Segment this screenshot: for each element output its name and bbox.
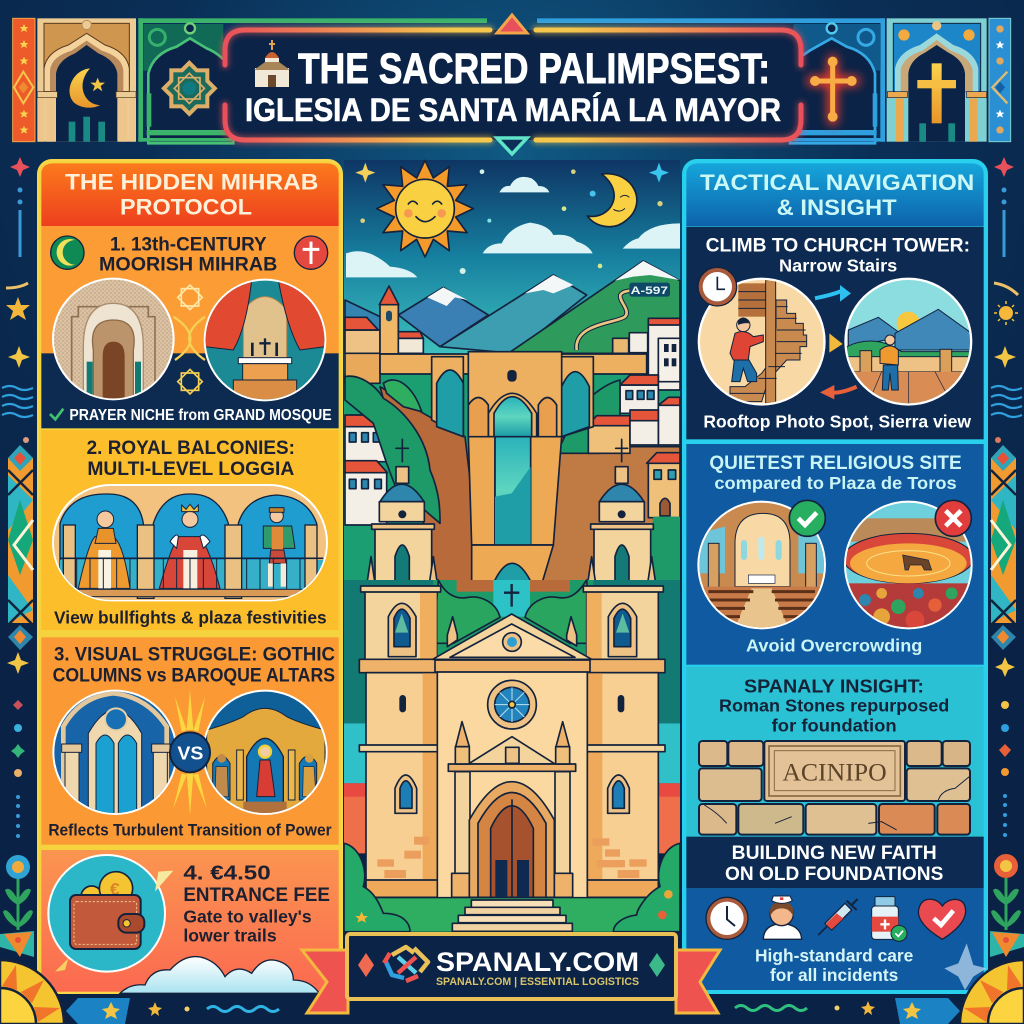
left side decorations <box>0 157 64 1024</box>
section 3 <box>41 637 339 845</box>
takeaway strip: ON OLD FOUNDATIONS <box>725 864 943 885</box>
title text: THE SACRED PALIMPSEST: <box>298 45 770 93</box>
star <box>861 1001 875 1015</box>
ribbon left <box>302 950 348 1013</box>
dotted line <box>18 188 22 257</box>
tribal band <box>991 445 1016 650</box>
wallet medallion: € <box>110 879 120 899</box>
altar medallion <box>203 279 327 401</box>
right blue strip <box>989 18 1011 142</box>
title text <box>245 45 781 128</box>
icon: clock <box>706 897 748 939</box>
section 4 background <box>41 850 339 992</box>
section 3 caption: Reflects Turbulent Transition of Power <box>48 822 332 840</box>
cliffs <box>344 373 680 590</box>
waves <box>2 386 33 417</box>
left panel <box>38 160 342 993</box>
church interior medallion <box>697 501 826 629</box>
cloud <box>120 957 319 993</box>
icon: top triangle <box>497 15 527 33</box>
icon: crescent badge <box>51 236 84 269</box>
VS badge <box>170 732 210 772</box>
icon: smiling sun <box>377 160 473 257</box>
ACINIPO inscription <box>769 746 900 796</box>
takeaway strip <box>686 837 984 888</box>
gothic medallion <box>52 690 178 817</box>
sky <box>344 160 680 373</box>
loggia illustration <box>52 484 328 601</box>
left tower <box>359 586 441 898</box>
panel frame <box>683 160 987 993</box>
title panel <box>225 30 801 140</box>
star <box>994 157 1014 177</box>
blue pennant <box>66 998 130 1024</box>
icon: small church <box>254 40 290 87</box>
entrance steps and lawn <box>344 843 680 932</box>
flower <box>3 855 33 930</box>
knot ornament <box>173 285 205 394</box>
mountains <box>345 261 680 353</box>
icon: glowing orange cross <box>810 57 857 122</box>
left tower upper <box>366 439 438 590</box>
section 2 caption: View bullfights & plaza festivities <box>54 607 327 627</box>
baroque medallion <box>202 690 328 815</box>
section 3 heading: 3. VISUAL STRUGGLE: GOTHIC <box>54 645 335 666</box>
section 4 <box>41 850 339 993</box>
right town <box>557 318 680 590</box>
takeaway strip: BUILDING NEW FAITH <box>732 843 937 864</box>
section 2 heading: 2. ROYAL BALCONIES: <box>87 438 295 459</box>
icon: moorish arch with crescent <box>37 18 136 142</box>
bullring medallion <box>843 501 973 629</box>
panel heading <box>41 163 339 226</box>
dot <box>23 437 29 443</box>
icon: eight point star <box>161 60 218 117</box>
care caption: for all incidents <box>770 965 898 985</box>
blue pennant <box>895 998 960 1024</box>
road label A-597: A-597 <box>631 285 668 297</box>
left orange strip <box>13 18 35 142</box>
section 1 caption: PRAYER NICHE from GRAND MOSQUE <box>69 407 332 424</box>
section 3 background <box>41 637 339 845</box>
quiet heading: QUIETEST RELIGIOUS SITE <box>709 453 962 474</box>
care caption <box>755 946 914 985</box>
section 2 heading: MULTI-LEVEL LOGGIA <box>87 459 294 480</box>
flower <box>991 854 1021 930</box>
waves <box>735 1006 840 1010</box>
tribal band <box>8 445 33 650</box>
stairs medallion <box>698 278 826 406</box>
panel heading <box>686 163 984 226</box>
insight background <box>686 667 984 837</box>
dot <box>995 437 1001 443</box>
icon: heart with check <box>918 899 966 939</box>
icon: check badge <box>789 500 825 536</box>
star <box>148 1002 162 1016</box>
section 2 background <box>41 430 339 630</box>
sun arc <box>6 283 28 288</box>
roman stone wall <box>699 741 970 835</box>
icon: nurse <box>763 896 802 939</box>
fee text: Gate to valley's <box>183 907 312 927</box>
icon: syringe <box>818 899 858 935</box>
right panel <box>683 160 987 993</box>
icon: medicine bottle <box>872 897 907 941</box>
panel heading: PROTOCOL <box>120 194 252 219</box>
star <box>994 346 1016 368</box>
right side decorations <box>960 157 1024 1024</box>
section 3 heading <box>53 645 335 687</box>
view medallion <box>844 278 972 406</box>
star right <box>649 953 665 977</box>
central illustration: church <box>344 580 680 932</box>
star <box>6 297 30 320</box>
fee text: ENTRANCE FEE <box>183 885 330 906</box>
care section <box>686 888 987 990</box>
ribbon right <box>676 950 720 1013</box>
sunburst corner <box>0 960 64 1024</box>
clock icon <box>698 267 737 306</box>
sunburst corner <box>960 960 1024 1024</box>
sun arc <box>994 283 1018 295</box>
bottom right ornaments <box>735 998 960 1024</box>
star <box>8 346 30 368</box>
wallet medallion <box>47 854 173 973</box>
section 3 heading: COLUMNS vs BAROQUE ALTARS <box>53 666 335 687</box>
bridge <box>380 352 647 590</box>
star <box>7 652 29 674</box>
panel frame <box>38 160 342 993</box>
header ornament left <box>13 18 487 143</box>
brand name: SPANALY.COM <box>436 947 639 977</box>
banner box <box>347 934 676 999</box>
fee text <box>183 862 330 946</box>
logo banner <box>302 934 720 1013</box>
tower section background <box>686 227 984 439</box>
header ornament right <box>537 18 1011 143</box>
icon: cross badge <box>935 500 971 536</box>
care caption: High-standard care <box>755 946 914 966</box>
bottom left ornaments <box>66 998 279 1024</box>
central illustration: upper <box>344 160 680 590</box>
section 2 <box>41 430 339 630</box>
tribal corner <box>0 931 34 957</box>
title frame <box>225 30 801 140</box>
road label A-597 <box>629 283 670 297</box>
icon: cross on pediment <box>504 584 519 607</box>
icon: cross badge <box>294 236 328 269</box>
quiet section background <box>686 444 984 665</box>
blue geometric frame <box>537 18 885 143</box>
fee text: lower trails <box>183 926 277 946</box>
VS badge: VS <box>177 742 203 763</box>
ACINIPO inscription: ACINIPO <box>782 759 887 787</box>
light burst <box>173 690 207 815</box>
star <box>995 657 1015 677</box>
insight section <box>686 667 987 990</box>
insight heading: for foundation <box>772 716 897 736</box>
logo mark <box>384 947 428 981</box>
care background <box>686 888 984 990</box>
dot column <box>999 701 1011 837</box>
title banner <box>225 15 801 154</box>
section 1 <box>41 226 339 428</box>
waves <box>184 1006 279 1012</box>
insight heading <box>719 675 949 736</box>
star <box>10 157 30 177</box>
panel heading: & INSIGHT <box>777 195 897 220</box>
dotted line <box>1002 188 1006 257</box>
small sun <box>994 301 1018 325</box>
section 1 heading: 1. 13th-CENTURY <box>110 235 267 256</box>
panel heading: THE HIDDEN MIHRAB <box>65 169 318 194</box>
tower heading <box>706 236 970 276</box>
centre facade <box>433 614 592 898</box>
green geometric frame <box>138 18 487 143</box>
mihrab medallion <box>50 277 177 400</box>
star left <box>358 953 374 977</box>
section 1 heading <box>99 235 277 276</box>
dot column <box>11 700 25 838</box>
tribal corner <box>990 931 1024 957</box>
title text: IGLESIA DE SANTA MARÍA LA MAYOR <box>245 92 781 128</box>
sparkle mark <box>944 943 987 990</box>
fee text: 4. €4.50 <box>183 862 271 884</box>
section 1 background <box>41 226 339 428</box>
panel heading: TACTICAL NAVIGATION <box>700 170 974 195</box>
section 1 heading: MOORISH MIHRAB <box>99 255 277 276</box>
tower heading: Narrow Stairs <box>779 256 897 276</box>
portal <box>448 722 576 898</box>
quiet heading <box>709 453 962 493</box>
arrows <box>815 285 857 399</box>
quiet caption: Avoid Overcrowding <box>746 636 922 656</box>
waves <box>991 386 1022 417</box>
rose window <box>488 680 536 729</box>
icon: bottom triangle <box>497 138 527 154</box>
quiet section <box>686 444 984 665</box>
right tower upper <box>587 439 657 590</box>
left town <box>345 286 440 525</box>
quiet heading: compared to Plaza de Toros <box>714 473 957 493</box>
right tower <box>583 586 665 898</box>
tower heading: CLIMB TO CHURCH TOWER: <box>706 236 970 257</box>
tower caption: Rooftop Photo Spot, Sierra view <box>703 412 972 432</box>
stars and dots in sky <box>355 163 669 274</box>
insight heading: Roman Stones repurposed <box>719 696 949 716</box>
section 2 heading <box>87 438 295 480</box>
clouds <box>346 177 680 277</box>
icon: christian arch with gold cross <box>887 18 987 142</box>
icon: crescent moon <box>587 174 637 227</box>
brand tagline: SPANALY.COM | ESSENTIAL LOGISTICS <box>436 976 639 988</box>
insight heading: SPANALY INSIGHT: <box>744 675 924 696</box>
tower section <box>686 227 984 439</box>
side scenery <box>344 580 680 853</box>
